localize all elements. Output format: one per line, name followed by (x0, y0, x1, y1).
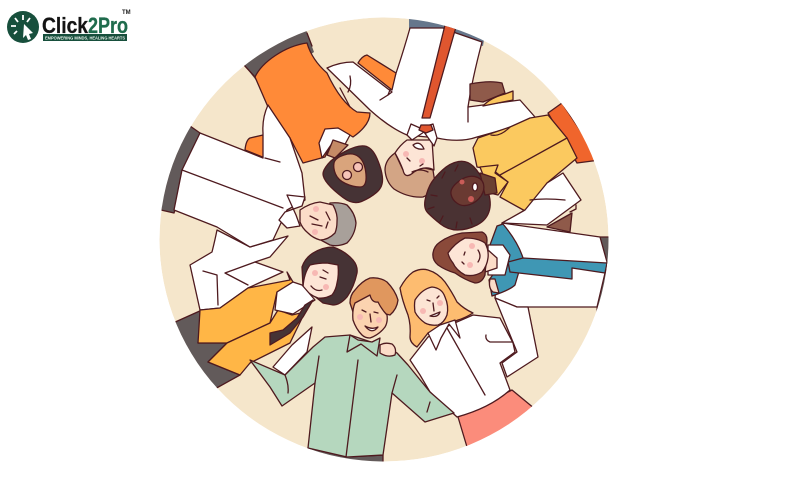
logo: Click2Pro: TM (122, 10, 131, 16)
long hair tail (270, 300, 313, 345)
logo: Click2Pro: 2Pro (88, 13, 128, 38)
head: black hair (302, 247, 357, 305)
head: grey hair (317, 203, 356, 246)
person: blonde, white shirt, pink skirt (400, 269, 535, 460)
collar (279, 195, 305, 228)
logo: Click2Pro: EMPOWERING MINDS, HEALING HEARTS (45, 36, 125, 40)
head: black hair (323, 146, 383, 203)
head: ginger hair (350, 278, 398, 315)
logo: Click2Pro: Click (42, 13, 89, 38)
person: orange vest (175, 229, 358, 388)
person: yellow top, afro (425, 82, 600, 232)
head: brown hair (433, 232, 487, 283)
person: grey hair, white shirt (161, 105, 356, 247)
illustration: circle of friends (150, 0, 612, 470)
collar (480, 165, 508, 195)
head: blonde hair (400, 269, 473, 347)
collar (347, 335, 380, 356)
hand on shoulder (380, 343, 396, 356)
head: afro (425, 161, 490, 230)
person: blue jacket (433, 223, 612, 377)
person: mint shirt (250, 278, 454, 470)
logo: Click2Pro (7, 10, 131, 43)
collar (488, 245, 510, 275)
background circle (160, 18, 608, 462)
collar (275, 282, 315, 314)
person: orange top (244, 31, 384, 204)
collar (407, 124, 437, 146)
collar (319, 128, 350, 158)
head: tan hair (385, 153, 435, 197)
white lower arm (273, 327, 312, 375)
person: white shirt, red tie (327, 5, 535, 197)
orange sleeve (358, 55, 396, 90)
collar (428, 320, 460, 350)
